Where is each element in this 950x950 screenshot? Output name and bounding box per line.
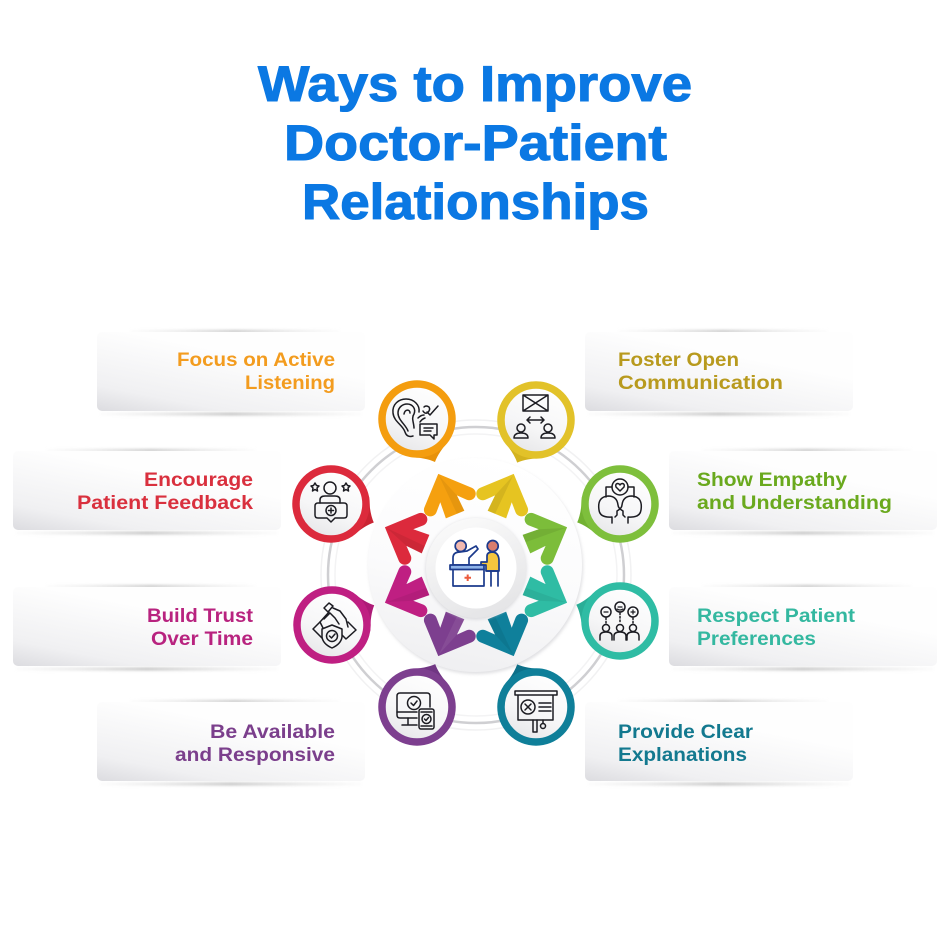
panel: focus on active listening: Focus on Active [177,349,335,371]
pin: feedback icon [296,469,382,542]
panel: be available and responsive [97,700,365,786]
pin: explanation icon [498,656,571,742]
panel: build trust over time [13,585,281,670]
panel: show empathy and understanding: and Understanding [697,492,892,514]
panel: encourage patient feedback [13,449,281,534]
panel: build trust over time: Build Trust [147,605,254,627]
title: Doctor-Patient [284,115,667,171]
arrow: red [374,502,436,570]
arrow: yellow [471,463,539,525]
arrow: teal [516,560,578,628]
panel: provide clear explanations [585,700,853,786]
pin: empathy icon [569,469,655,542]
panel: foster open communication: Foster Open [618,349,739,371]
pin: communication icon [498,385,571,471]
panel: focus on active listening: Listening [245,372,335,394]
centre hub with doctor and patient icon [426,518,526,620]
panel: focus on active listening [97,330,365,416]
title: Ways to Improve [258,56,692,112]
panel: provide clear explanations: Provide Clear [618,721,753,743]
arrow: orange [413,463,481,525]
panel: foster open communication: Communication [618,372,783,394]
outer connecting ring [321,420,631,730]
panel: be available and responsive: and Responsive [175,744,335,766]
title [258,56,692,230]
panel: respect patient preferences [669,585,937,670]
pin: availability icon [382,656,455,742]
panel: encourage patient feedback: Encourage [144,469,253,491]
panel: encourage patient feedback: Patient Feedback [77,492,253,514]
panel: build trust over time: Over Time [151,628,253,650]
panel: respect patient preferences: Preferences [697,628,816,650]
pin: listening icon [382,384,455,470]
title: Relationships [302,174,649,230]
pin: trust icon [297,586,383,660]
pin: preferences icon [569,585,655,656]
panel: respect patient preferences: Respect Patient [697,605,856,627]
panel: foster open communication [585,330,853,416]
panel: be available and responsive: Be Available [210,721,335,743]
arrow: magenta [374,560,436,628]
arrow: dark teal [471,605,539,667]
panel: provide clear explanations: Explanations [618,744,747,766]
arrow: green [516,502,578,570]
arrow: purple [413,605,481,667]
panel: show empathy and understanding: Show Empathy [697,469,847,491]
central disc [368,458,583,674]
panel: show empathy and understanding [669,449,937,534]
